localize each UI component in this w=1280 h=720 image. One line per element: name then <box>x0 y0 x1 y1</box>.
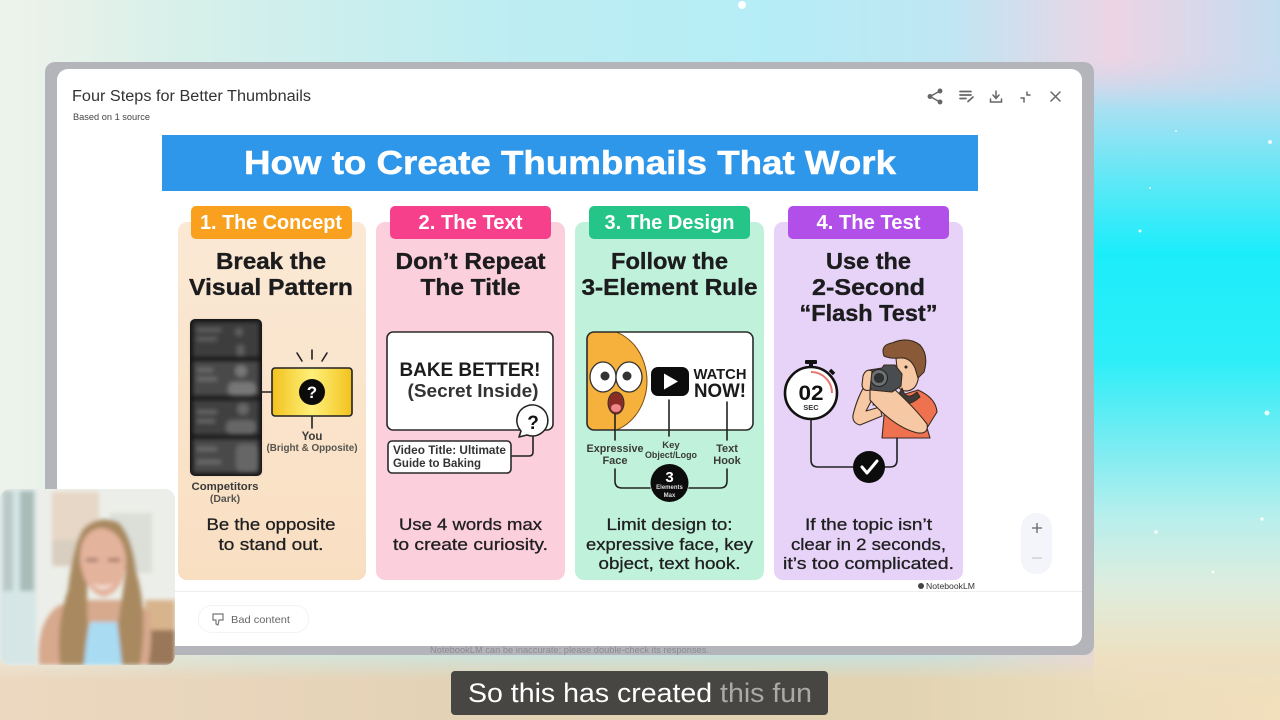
infographic title: How to Create Thumbnails That Work <box>244 144 897 181</box>
shine rays <box>297 350 327 361</box>
icon: close <box>1051 92 1060 101</box>
label: key object: Key <box>662 440 680 451</box>
zoom controls <box>1021 513 1052 574</box>
heading 3 <box>582 248 758 300</box>
label: key object: Object/Logo <box>645 450 697 461</box>
icon: play logo <box>651 367 689 396</box>
label: text hook: Text <box>716 443 738 455</box>
takeaway 4 <box>783 515 954 573</box>
icon: question bubble <box>517 405 548 437</box>
takeaway 3: Limit design to: <box>606 515 732 534</box>
caption bar <box>451 671 828 715</box>
heading 3: Follow the <box>611 248 728 274</box>
connector <box>512 437 533 456</box>
connectors <box>615 400 727 488</box>
label: text hook <box>713 443 742 467</box>
dialog title: Four Steps for Better Thumbnails <box>72 88 311 105</box>
step tab 3: 3. The Design <box>604 212 734 234</box>
heading 2: Don’t Repeat <box>396 248 546 274</box>
label: competitors: Competitors <box>192 481 258 493</box>
heading 2 <box>396 248 546 300</box>
label: expressive face <box>586 443 644 467</box>
badge: 3 elements max: Elements <box>656 485 683 491</box>
takeaway 2: to create curiosity. <box>393 535 548 554</box>
label: you: You <box>302 431 322 443</box>
label: text hook: Hook <box>713 455 742 467</box>
thumbnail mockup: BAKE BETTER! <box>400 360 540 381</box>
video title box: Guide to Baking <box>393 458 481 470</box>
label: you <box>266 431 358 454</box>
takeaway 4: If the topic isn’t <box>805 515 932 534</box>
connectors <box>811 420 897 467</box>
heading 1 <box>189 248 353 300</box>
text hook: NOW! <box>694 381 746 402</box>
icon: stopwatch: SEC <box>803 403 819 412</box>
heading 4: “Flash Test” <box>800 300 938 326</box>
bad content button: Bad content <box>231 614 290 626</box>
step tab 2: 2. The Text <box>418 212 523 234</box>
takeaway 1: Be the opposite <box>206 515 336 534</box>
takeaway 3: expressive face, key <box>586 535 754 554</box>
badge: 3 elements max: Max <box>664 493 676 499</box>
badge: 3 elements max <box>650 464 688 502</box>
icon: question bubble: ? <box>527 413 539 434</box>
thumbnail mockup: (Secret Inside) <box>408 381 538 401</box>
step tab 1: 1. The Concept <box>200 212 342 234</box>
icon: share <box>928 89 942 104</box>
label: expressive face: Face <box>602 455 628 467</box>
heading 1: Visual Pattern <box>189 274 353 300</box>
caption bar: So this has created this fun <box>468 678 812 708</box>
step tab 4: 4. The Test <box>816 212 921 234</box>
thumbnail mockup with face, play logo and text hook <box>586 331 754 431</box>
infographic header banner <box>162 135 978 191</box>
takeaway 1: to stand out. <box>218 535 324 554</box>
bad content button <box>198 606 308 632</box>
icon: check badge <box>853 451 885 483</box>
takeaway 4: it’s too complicated. <box>783 554 954 573</box>
app window frame <box>45 62 1094 655</box>
notebooklm watermark: NotebookLM <box>926 581 975 591</box>
text hook: WATCH <box>694 366 746 383</box>
toolbar icons <box>928 89 1060 104</box>
text hook <box>694 366 746 402</box>
webcam presenter <box>0 489 175 665</box>
heading 4 <box>800 248 938 326</box>
source count: Based on 1 source <box>73 112 150 122</box>
label: you: (Bright & Opposite) <box>266 442 358 454</box>
heading 3: 3-Element Rule <box>582 274 758 300</box>
label: competitors <box>192 481 258 505</box>
takeaway 3: object, text hook. <box>598 554 740 573</box>
icon: thumbs down <box>213 614 223 625</box>
takeaway 4: clear in 2 seconds, <box>791 535 946 554</box>
icon: edit list <box>960 92 973 102</box>
competitor thumbnails stack <box>190 319 262 476</box>
icon: stopwatch: 02 <box>798 382 824 405</box>
icon: expressive face <box>588 332 648 430</box>
label: key object <box>645 440 697 461</box>
takeaway 2: Use 4 words max <box>399 515 543 534</box>
step tab 2 <box>390 206 551 239</box>
footer divider <box>57 591 1082 592</box>
step tab 1 <box>191 206 352 239</box>
heading 4: Use the <box>826 248 911 274</box>
icon: collapse <box>1021 92 1030 102</box>
bright thumbnail with question mark <box>272 368 352 416</box>
icon: download <box>990 91 1002 102</box>
label: expressive face: Expressive <box>586 443 644 455</box>
thumbnail mockup <box>387 332 553 430</box>
icon: photographer <box>853 340 937 438</box>
step tab 4 <box>788 206 949 239</box>
video title box <box>388 441 511 473</box>
takeaway 1 <box>206 515 336 554</box>
panel: 3 the design <box>555 206 764 580</box>
heading 4: 2-Second <box>812 274 925 300</box>
panel: 2 the text <box>376 206 565 580</box>
heading 2: The Title <box>420 274 520 300</box>
takeaway 3 <box>586 515 754 573</box>
icon: stopwatch <box>785 360 837 419</box>
panel: 4 the test <box>774 206 963 580</box>
heading 1: Break the <box>216 248 326 274</box>
label: competitors: (Dark) <box>210 493 240 505</box>
panel: 1 the concept <box>178 206 366 580</box>
bright thumbnail with question mark: ? <box>307 383 317 402</box>
badge: 3 elements max: 3 <box>665 469 674 486</box>
disclaimer: NotebookLM can be inaccurate; please double-check its responses. <box>430 645 709 655</box>
takeaway 2 <box>393 515 548 554</box>
video title box: Video Title: Ultimate <box>393 445 506 457</box>
step tab 3 <box>589 206 750 239</box>
connector <box>262 392 312 428</box>
